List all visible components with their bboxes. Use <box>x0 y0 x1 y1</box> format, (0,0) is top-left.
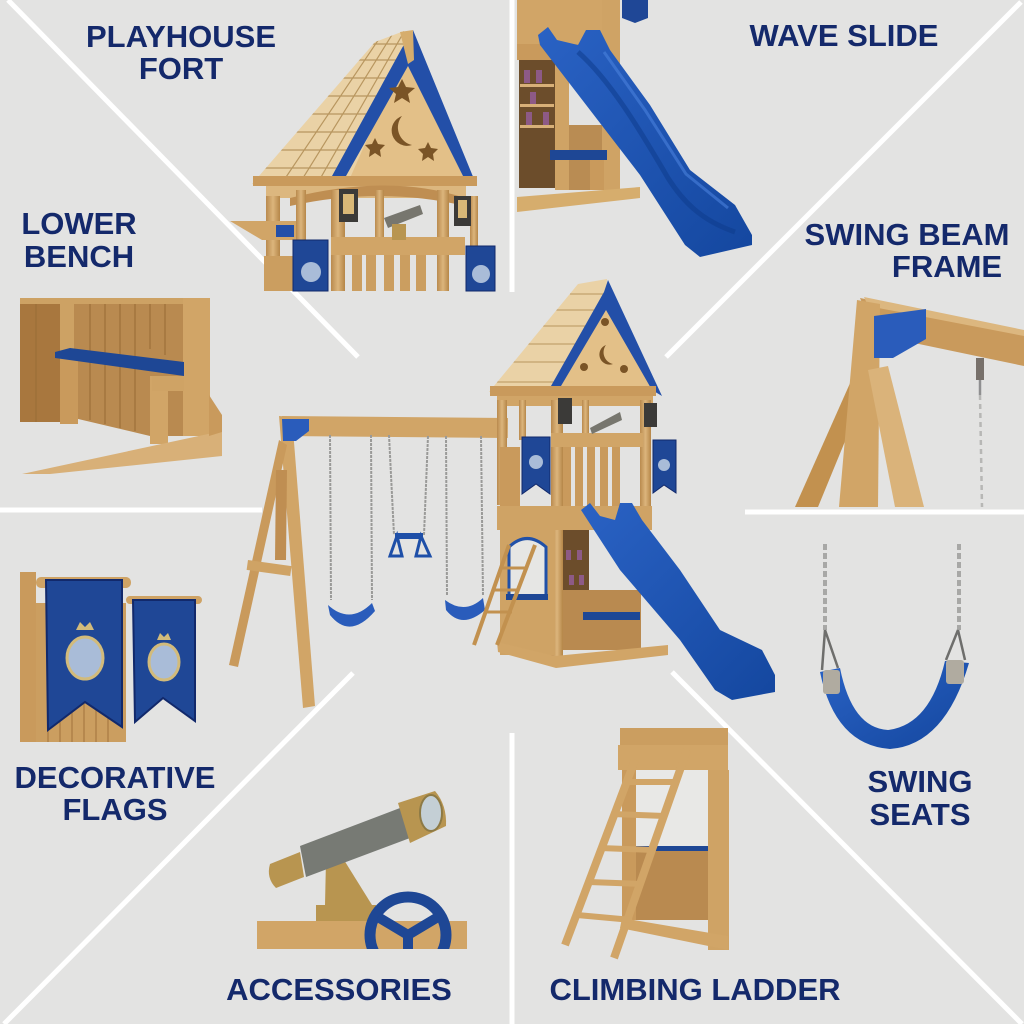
title: decorative flags: FLAGS <box>62 792 168 827</box>
title: climbing ladder: CLIMBING LADDER <box>549 972 841 1007</box>
title: wave slide: WAVE SLIDE <box>750 18 938 53</box>
title: swing seats: SWING <box>867 764 973 799</box>
tower body <box>490 386 668 668</box>
panel: climbing ladder illustration <box>565 728 729 958</box>
title: playhouse fort: FORT <box>139 51 223 86</box>
swing frame <box>229 416 508 708</box>
title: playhouse fort: PLAYHOUSE <box>86 19 276 54</box>
panel: accessories telescope <box>257 791 467 949</box>
panel: playhouse fort illustration <box>230 30 495 291</box>
title: decorative flags: DECORATIVE <box>15 760 215 795</box>
blue slide <box>581 503 775 700</box>
panel: wave slide illustration <box>517 0 752 257</box>
title: swing beam frame: SWING BEAM <box>805 217 1009 252</box>
title: lower bench: BENCH <box>24 239 134 274</box>
panel: central playset <box>229 279 775 708</box>
swings and trapeze <box>328 435 485 627</box>
title: swing beam frame: FRAME <box>892 249 1002 284</box>
panel: lower bench illustration <box>20 298 222 474</box>
title: lower bench: LOWER <box>21 206 137 241</box>
title: accessories: ACCESSORIES <box>226 972 452 1007</box>
title: swing seats: SEATS <box>869 797 971 832</box>
tower flags <box>522 437 676 494</box>
panel: decorative flags illustration <box>20 572 202 742</box>
tower roof <box>489 279 662 396</box>
panel: swing seat illustration <box>820 544 969 749</box>
panel: swing beam frame illustration <box>795 297 1024 507</box>
ladder <box>474 545 535 645</box>
